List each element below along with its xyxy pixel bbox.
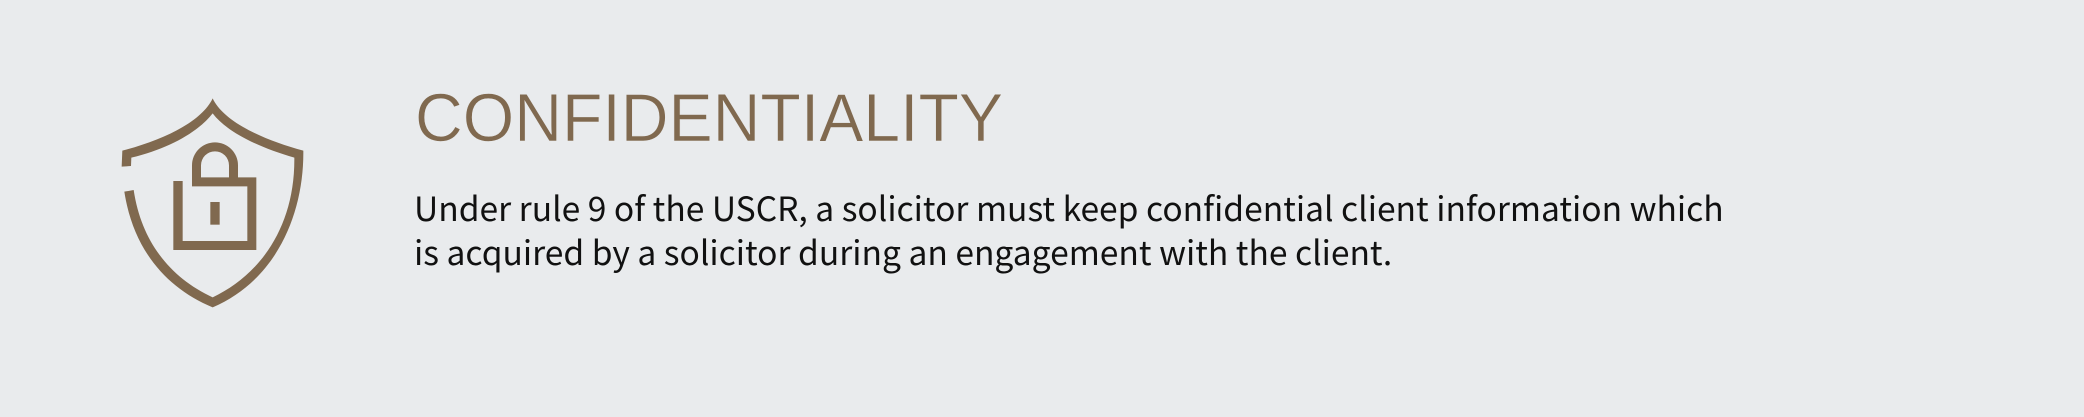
body text xyxy=(414,182,1724,275)
icon: shield with padlock xyxy=(122,98,304,308)
body text: Under rule 9 of the USCR, a solicitor must keep confidential client information which xyxy=(414,182,1724,231)
body text: is acquired by a solicitor during an engagement with the client. xyxy=(414,226,1392,275)
